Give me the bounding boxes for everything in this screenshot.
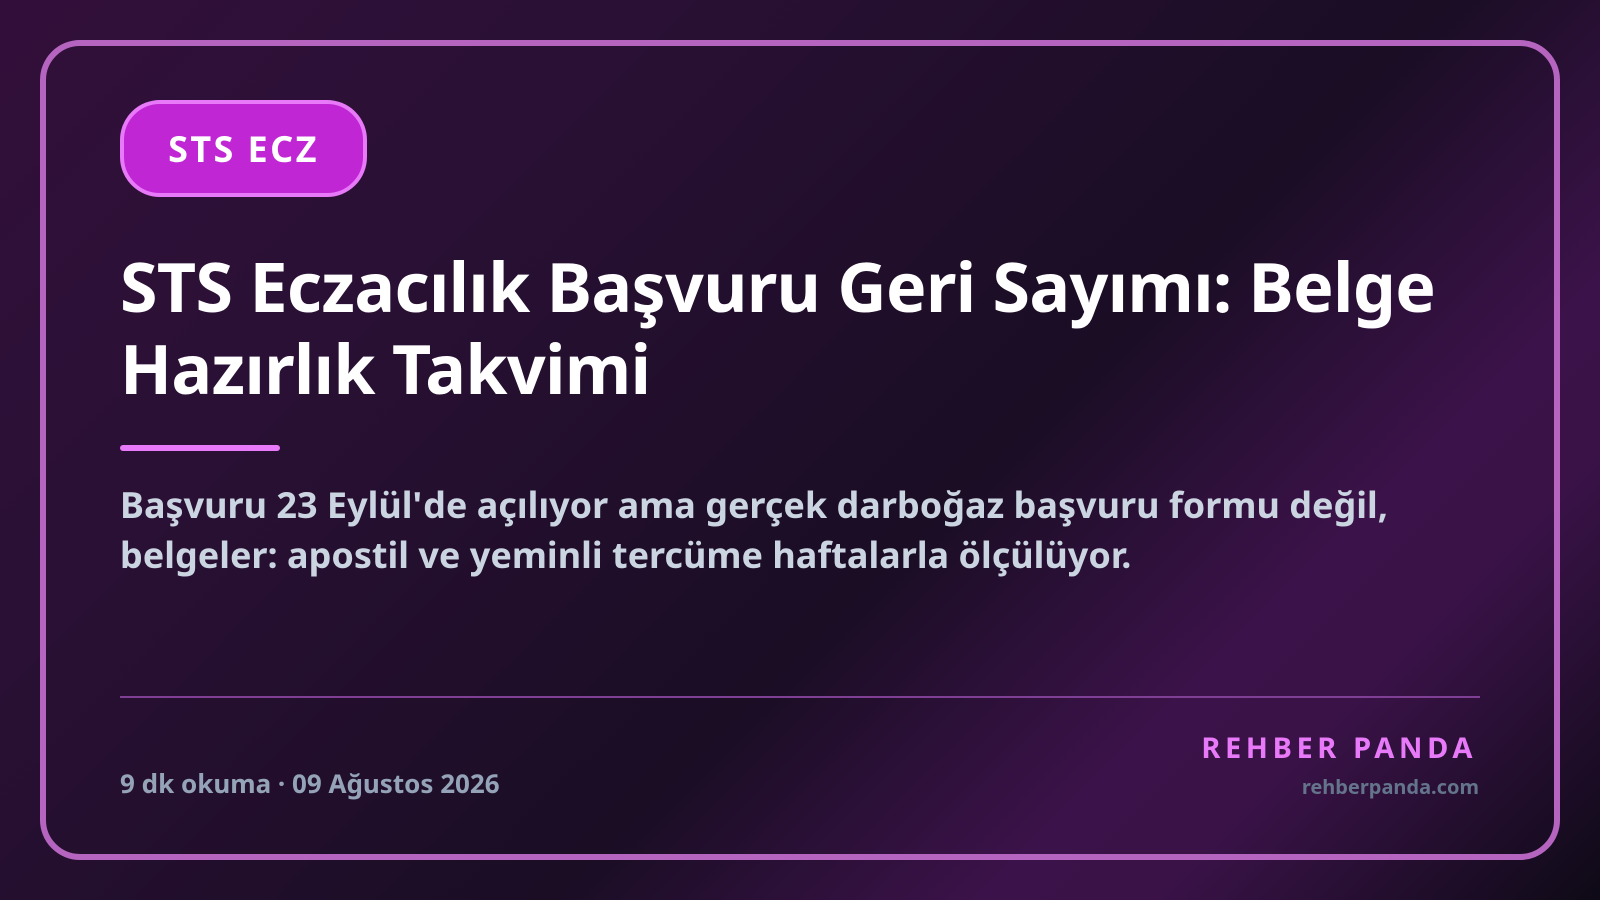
title: STS Eczacılık Başvuru Geri Sayımı: Belge [120,239,1435,332]
brand name: REHBER PANDA [1201,728,1477,767]
title: Hazırlık Takvimi [120,321,650,414]
subtitle text [120,480,1388,579]
reading time and date: 9 dk okuma · 09 Ağustos 2026 [120,765,500,801]
badge: STS ECZ [120,100,367,197]
badge: STS ECZ: STS ECZ [168,124,319,173]
title [120,239,1435,414]
brand website: rehberpanda.com [1302,773,1479,800]
subtitle text: Başvuru 23 Eylül'de açılıyor ama gerçek darboğaz başvuru formu değil, [120,480,1388,529]
subtitle text: belgeler: apostil ve yeminli tercüme haftalarla ölçülüyor. [120,530,1131,579]
accent bar [120,445,280,451]
